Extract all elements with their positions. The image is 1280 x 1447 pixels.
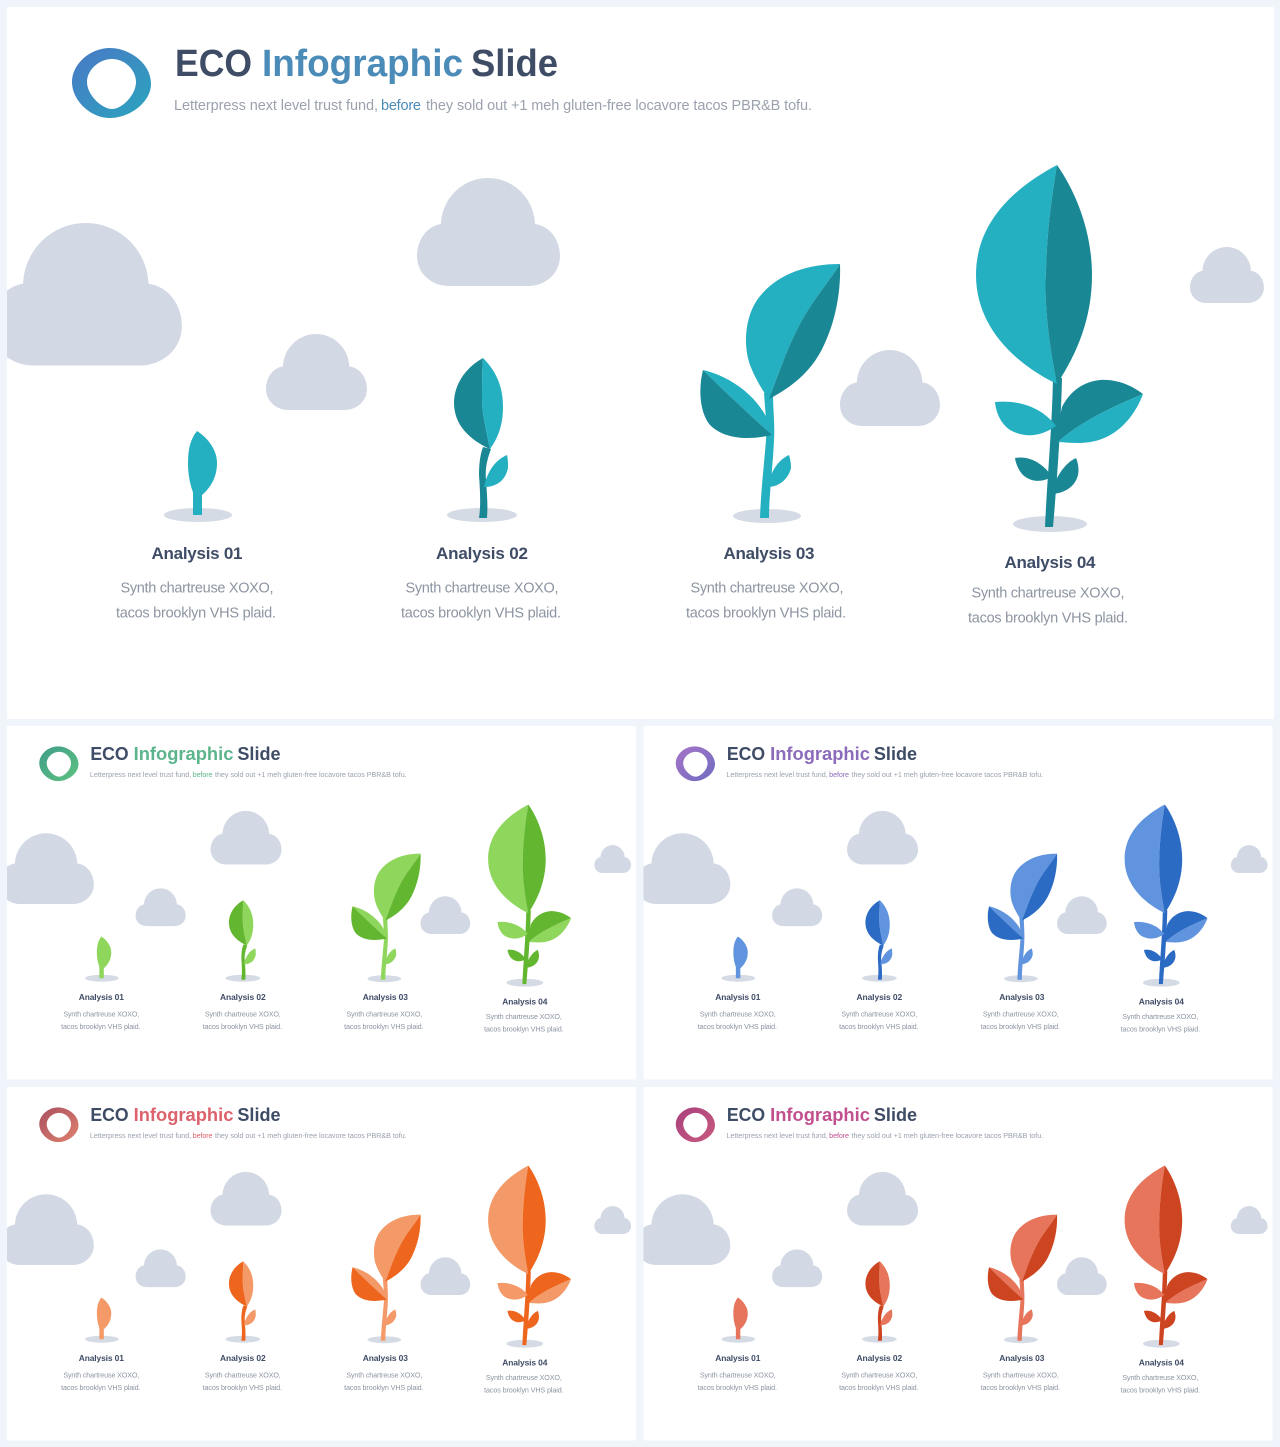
panel: red slide: Analysis 01 [715,1353,761,1363]
panel: green slide: Synth chartreuse XOXO, [346,1010,422,1019]
panel: red slide: they sold out +1 meh gluten-free locavore tacos PBR&B tofu. [852,1131,1043,1140]
plant 1 [164,431,232,522]
panel: blue slide: Slide [874,743,917,764]
panel: green slide: Slide [237,743,281,764]
analysis 04: Synth chartreuse XOXO, [972,586,1124,602]
subtitle: they sold out +1 meh gluten-free locavore tacos PBR&B tofu. [426,98,812,114]
title: Infographic [262,43,463,85]
panel: red slide: before [829,1131,849,1140]
panel: orange slide: tacos brooklyn VHS plaid. [203,1383,282,1392]
panel: red slide: Infographic [770,1104,870,1125]
panel: blue slide: Letterpress next level trust fund, [726,770,828,779]
panel: green slide [0,726,636,1080]
panel: blue slide: Infographic [770,743,870,764]
panel: blue slide: Analysis 01 [715,992,761,1002]
panel: orange slide: tacos brooklyn VHS plaid. [484,1386,564,1395]
panel: blue slide: tacos brooklyn VHS plaid. [839,1022,919,1031]
panel: orange slide [0,1087,636,1441]
panel: blue slide: Synth chartreuse XOXO, [841,1010,917,1019]
panel: blue slide: Analysis 02 [856,992,902,1002]
analysis 02 [401,544,561,622]
panel: blue slide: they sold out +1 meh gluten-free locavore tacos PBR&B tofu. [852,770,1043,779]
analysis 02: Synth chartreuse XOXO, [406,580,558,596]
panel: red slide [636,1087,1273,1441]
panel: red slide: Synth chartreuse XOXO, [1122,1373,1198,1382]
analysis 03: tacos brooklyn VHS plaid. [686,606,846,622]
panel: green slide: ECO [90,743,129,764]
analysis 03: Synth chartreuse XOXO, [690,580,844,596]
plant 4 [976,165,1143,532]
panel: green slide: Analysis 03 [363,992,408,1002]
panel: green slide: Infographic [134,743,233,764]
panel: blue slide: Synth chartreuse XOXO, [1122,1012,1198,1021]
panel: orange slide: Slide [237,1104,281,1125]
panel: orange slide: before [193,1131,213,1140]
panel: orange slide: Synth chartreuse XOXO, [205,1371,281,1380]
panel: red slide: Analysis 02 [856,1353,902,1363]
panel: green slide: Analysis 02 [220,992,266,1002]
panel: blue slide [636,726,1273,1080]
panel: red slide: Analysis 04 [1139,1358,1184,1368]
analysis 01 [116,544,276,622]
panel: red slide: Slide [874,1104,917,1125]
panel: blue slide: ECO [727,743,765,764]
panel: green slide: Synth chartreuse XOXO, [486,1012,562,1021]
panel: blue slide: Analysis 03 [999,992,1045,1002]
panel: orange slide: Synth chartreuse XOXO, [486,1373,562,1382]
panel: green slide: tacos brooklyn VHS plaid. [344,1022,424,1031]
panel: green slide: Synth chartreuse XOXO, [63,1010,139,1019]
panel: red slide: Synth chartreuse XOXO, [983,1371,1059,1380]
panel: orange slide: Analysis 03 [363,1353,408,1363]
panel: blue slide: tacos brooklyn VHS plaid. [1121,1025,1200,1034]
subtitle: before [381,98,421,114]
analysis 01: Synth chartreuse XOXO, [120,580,274,596]
clouds [0,178,1264,426]
panel: blue slide: Synth chartreuse XOXO, [700,1010,776,1019]
panel: green slide: they sold out +1 meh gluten-free locavore tacos PBR&B tofu. [215,770,407,779]
panel: blue slide: tacos brooklyn VHS plaid. [981,1022,1060,1031]
panel: blue slide: before [829,770,849,779]
panel: main teal slide [0,7,1274,719]
panel: red slide: Synth chartreuse XOXO, [841,1371,917,1380]
panel: orange slide: Analysis 04 [502,1358,548,1368]
panel: orange slide: Analysis 01 [79,1353,124,1363]
subtitle: Letterpress next level trust fund, [174,98,378,114]
panel: orange slide: Analysis 02 [220,1353,266,1363]
panel: green slide: Analysis 04 [502,997,548,1007]
plant 3 [700,264,840,523]
panel: green slide: tacos brooklyn VHS plaid. [203,1022,282,1031]
logo ring [72,48,151,118]
panel: orange slide: they sold out +1 meh gluten-free locavore tacos PBR&B tofu. [215,1131,407,1140]
analysis 01: tacos brooklyn VHS plaid. [116,606,276,622]
panel: orange slide: Synth chartreuse XOXO, [346,1371,422,1380]
panel: red slide: Synth chartreuse XOXO, [700,1371,776,1380]
panel: orange slide: Letterpress next level trust fund, [90,1131,191,1140]
analysis 03 [686,544,846,622]
panel: green slide: Synth chartreuse XOXO, [205,1010,281,1019]
analysis 02: Analysis 02 [436,544,528,563]
analysis 04 [968,553,1128,626]
panel: blue slide: Synth chartreuse XOXO, [983,1010,1059,1019]
analysis 02: tacos brooklyn VHS plaid. [401,606,561,622]
panel: orange slide: tacos brooklyn VHS plaid. [61,1383,141,1392]
analysis 03: Analysis 03 [724,544,814,563]
title: ECO [175,43,252,85]
subtitle [174,98,812,114]
title [175,43,558,85]
panel: green slide: Letterpress next level trust fund, [90,770,191,779]
analysis 04: Analysis 04 [1004,553,1096,572]
panel: red slide: tacos brooklyn VHS plaid. [981,1383,1060,1392]
panel: red slide: tacos brooklyn VHS plaid. [839,1383,919,1392]
panel: red slide: Analysis 03 [999,1353,1045,1363]
panel: green slide: tacos brooklyn VHS plaid. [61,1022,141,1031]
panel: red slide: tacos brooklyn VHS plaid. [698,1383,777,1392]
panel: blue slide: tacos brooklyn VHS plaid. [698,1022,777,1031]
panel: green slide: tacos brooklyn VHS plaid. [484,1025,564,1034]
panel: red slide: tacos brooklyn VHS plaid. [1121,1386,1200,1395]
panel: red slide: Letterpress next level trust fund, [726,1131,828,1140]
panel: red slide: ECO [727,1104,765,1125]
panel: green slide: before [193,770,213,779]
panel: orange slide: Synth chartreuse XOXO, [63,1371,139,1380]
panel: green slide: Analysis 01 [79,992,124,1002]
panel: orange slide: ECO [90,1104,129,1125]
analysis 04: tacos brooklyn VHS plaid. [968,610,1128,626]
analysis 01: Analysis 01 [152,544,242,563]
panel: blue slide: Analysis 04 [1139,997,1184,1007]
panel: orange slide: tacos brooklyn VHS plaid. [344,1383,424,1392]
plant 2 [447,358,517,522]
title: Slide [471,43,558,85]
panel: orange slide: Infographic [134,1104,233,1125]
